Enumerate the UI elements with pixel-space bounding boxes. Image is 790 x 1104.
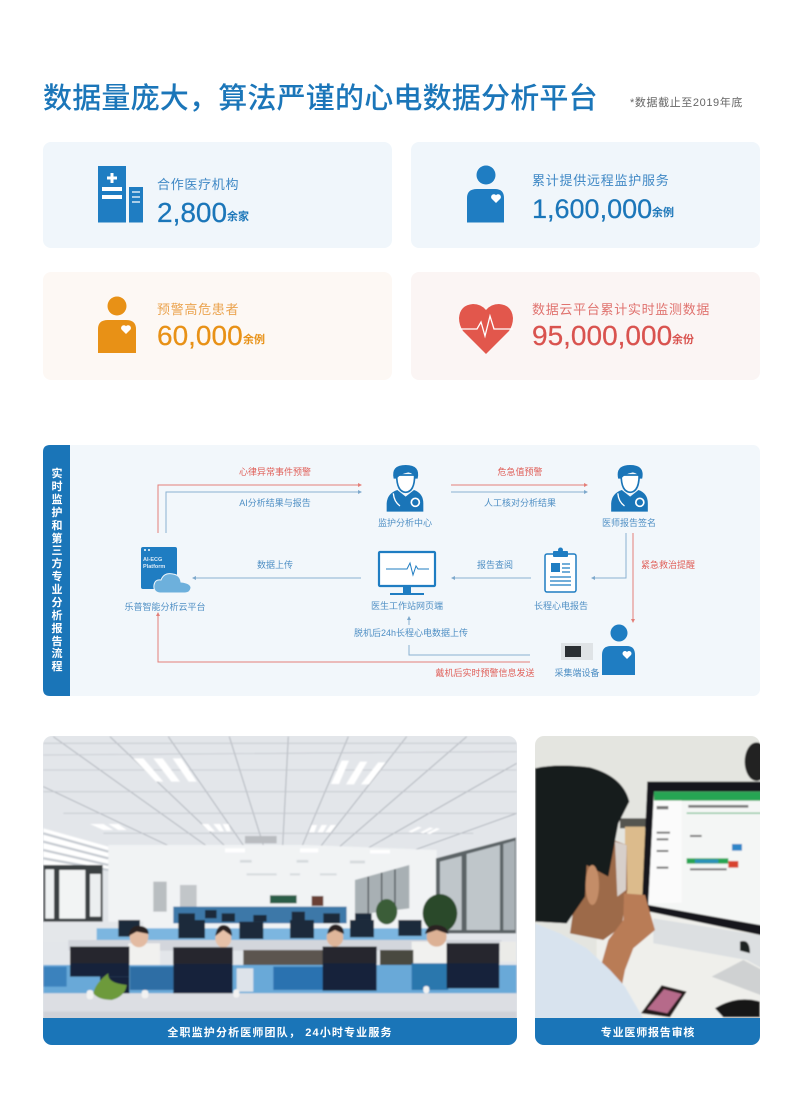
icon: signing doctor bbox=[611, 465, 648, 512]
caption bar: review: 专业医师报告审核 bbox=[601, 1025, 695, 1039]
sidebar heading: 程 bbox=[52, 659, 62, 673]
sidebar heading: 析 bbox=[52, 608, 62, 622]
panel: partner institutions bbox=[43, 142, 392, 248]
desk front bbox=[44, 992, 516, 1010]
arrow labels: 报告查阅 bbox=[477, 559, 513, 570]
sidebar heading: 业 bbox=[52, 583, 62, 596]
icon: workstation monitor bbox=[379, 552, 435, 595]
label: ECG report: 长程心电报告 bbox=[534, 600, 588, 611]
window blinds bbox=[43, 828, 108, 870]
sidebar heading: 方 bbox=[52, 556, 62, 570]
sidebar heading: 分 bbox=[52, 595, 62, 609]
number: 60,000 bbox=[157, 320, 243, 351]
desk bbox=[597, 910, 765, 1020]
unit: 余例 bbox=[652, 205, 674, 219]
title: 数据量庞大，算法严谨的心电数据分析平台 bbox=[43, 82, 598, 115]
plants bbox=[423, 894, 457, 933]
far room bbox=[108, 845, 437, 930]
front monitors bbox=[70, 943, 499, 995]
sidebar heading: 三 bbox=[52, 545, 62, 557]
number: 1,600,000 bbox=[532, 194, 652, 224]
sidebar heading: 监 bbox=[52, 492, 62, 506]
label: 合作医疗机构 bbox=[157, 177, 239, 192]
icon: monitoring center doctor bbox=[387, 465, 423, 512]
label: 累计提供远程监护服务 bbox=[532, 173, 670, 188]
panel: doctor review photo bbox=[530, 730, 769, 1050]
panel: workflow bbox=[43, 445, 760, 696]
arrow labels: 脱机后24h长程心电数据上传 bbox=[354, 627, 468, 638]
sidebar heading: 流 bbox=[52, 646, 62, 660]
arrow labels: AI分析结果与报告 bbox=[239, 497, 311, 508]
sidebar heading: 专 bbox=[52, 569, 62, 583]
number: 95,000,000 bbox=[532, 320, 672, 351]
sidebar heading: 时 bbox=[52, 479, 62, 493]
icon: recorder device bbox=[561, 643, 593, 660]
photo: office room bbox=[43, 736, 517, 1018]
sidebar heading bbox=[43, 445, 70, 696]
sidebar heading: 护 bbox=[52, 505, 62, 519]
photo: doctor at computer bbox=[535, 736, 760, 1018]
arrow labels: 心律异常事件预警 bbox=[239, 466, 311, 477]
arrow labels: 紧急救治提醒 bbox=[641, 559, 695, 570]
back wall bbox=[270, 895, 297, 903]
panel: monitoring team photo bbox=[40, 730, 520, 1050]
sidebar heading: 告 bbox=[52, 634, 62, 648]
panel: high-risk patients bbox=[43, 272, 392, 380]
infographic canvas bbox=[43, 83, 760, 1045]
ceiling lights bbox=[90, 758, 440, 834]
label: cloud platform: 乐普智能分析云平台 bbox=[124, 601, 206, 612]
arrow labels: 戴机后实时预警信息发送 bbox=[435, 667, 535, 678]
unit: 余份 bbox=[672, 332, 694, 346]
arrow labels: 危急值预警 bbox=[497, 466, 543, 477]
arrow: red arrows bbox=[156, 483, 635, 662]
monitor chin bbox=[653, 918, 760, 967]
number: 2,800 bbox=[157, 197, 227, 228]
person behind bbox=[744, 742, 760, 782]
label: signing doctor: 医师报告签名 bbox=[602, 517, 656, 528]
sidebar heading: 和 bbox=[52, 518, 62, 532]
icon: heart with pulse bbox=[459, 304, 513, 354]
caption bar: team bbox=[43, 1018, 517, 1045]
left windows bbox=[43, 865, 103, 922]
hand and arm bbox=[602, 893, 655, 992]
arrow labels bbox=[239, 466, 695, 678]
right glass partitions bbox=[355, 865, 409, 915]
label: workstation: 医生工作站网页端 bbox=[371, 600, 443, 611]
label: 数据云平台累计实时监测数据 bbox=[532, 302, 710, 317]
icon: cloud platform bbox=[141, 547, 191, 593]
caption bar: team: 全职监护分析医师团队， 24小时专业服务 bbox=[167, 1025, 393, 1039]
phone bbox=[641, 985, 687, 1017]
icon: patient orange bbox=[98, 296, 136, 353]
face and neck bbox=[570, 840, 627, 940]
label: monitoring center: 监护分析中心 bbox=[378, 517, 432, 528]
icon: patient blue bbox=[467, 166, 504, 222]
middle desks and staff bbox=[97, 928, 433, 940]
black phone on desk bbox=[715, 999, 760, 1017]
sidebar heading: 第 bbox=[52, 531, 62, 545]
caption bar: review bbox=[535, 1018, 760, 1045]
sidebar heading: 实 bbox=[52, 466, 62, 480]
unit: 余家 bbox=[227, 209, 249, 223]
panel: cloud data bbox=[411, 272, 760, 380]
arrow labels: 人工核对分析结果 bbox=[484, 497, 556, 508]
icon: hospital bbox=[98, 166, 143, 222]
air conditioner bbox=[245, 836, 277, 843]
wood shelf bbox=[620, 818, 647, 828]
ear bbox=[586, 865, 599, 905]
arrow: blue arrows bbox=[166, 490, 626, 655]
icon: patient in workflow bbox=[602, 624, 635, 675]
label: 预警高危患者 bbox=[157, 302, 239, 317]
panel: remote monitoring bbox=[411, 142, 760, 248]
arrow labels: 数据上传 bbox=[257, 559, 293, 570]
footnote: *数据截止至2019年底 bbox=[630, 95, 743, 109]
blue tinted band bbox=[43, 965, 517, 993]
hair bbox=[535, 766, 629, 923]
desk plant bbox=[93, 973, 127, 1000]
icon: ECG report bbox=[545, 548, 576, 592]
icon: cloud platform: AI-ECG bbox=[143, 557, 162, 563]
label: device: 采集端设备 bbox=[554, 667, 600, 678]
unit: 余例 bbox=[243, 332, 265, 346]
shirt bbox=[535, 923, 643, 1018]
icon: cloud platform: Platform bbox=[143, 564, 165, 570]
monitor bbox=[642, 782, 765, 936]
front row staff bbox=[128, 923, 503, 965]
sidebar heading: 报 bbox=[52, 621, 62, 635]
